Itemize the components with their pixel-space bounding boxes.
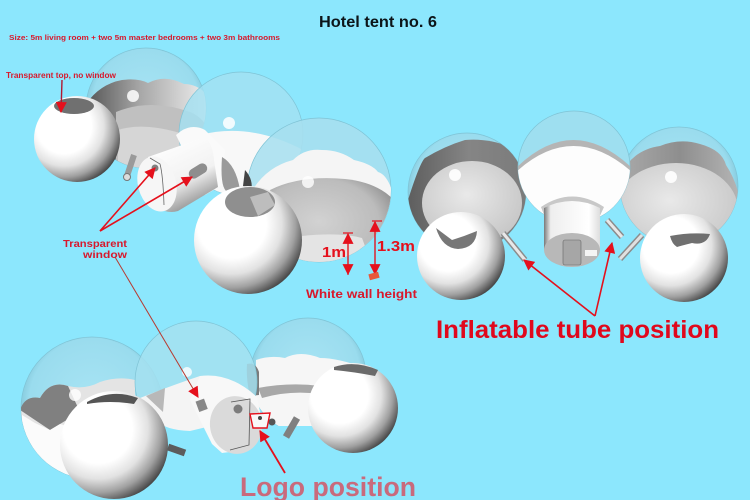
callout: transparent window: window — [82, 249, 128, 261]
callout: white wall height: 1m — [322, 244, 346, 261]
dome: left bedroom — [86, 48, 208, 175]
callout: transparent window — [63, 168, 198, 397]
left sphere — [417, 212, 505, 300]
callout: transparent window: Transparent — [63, 238, 128, 250]
entrance cylinder — [541, 196, 604, 267]
connector: entrance to bedrooms — [176, 127, 240, 195]
tent view: front — [408, 111, 740, 302]
callout: transparent top — [6, 71, 117, 112]
dome: centre — [134, 320, 258, 396]
dome: right bedroom — [243, 118, 392, 265]
logo marker — [250, 413, 270, 428]
inflatable tubes — [503, 220, 642, 260]
connector: entrance to bedrooms — [135, 367, 215, 431]
dome: right — [621, 126, 738, 236]
inflatable tube — [124, 155, 134, 180]
callout: transparent top: Transparent top, no window — [6, 71, 117, 80]
callout: logo position — [240, 431, 416, 500]
right sphere — [640, 214, 728, 302]
size description: Size: 5m living room + two 5m master bedrooms + two 3m bathrooms — [9, 33, 280, 42]
callout: white wall height: White wall height — [306, 289, 417, 301]
large sphere: bathroom — [194, 186, 302, 294]
left sphere — [60, 391, 168, 499]
dome: centre — [516, 111, 632, 225]
tent view: top-left perspective — [34, 48, 392, 294]
title: Hotel tent no. 6 — [319, 14, 437, 31]
right sphere — [308, 363, 398, 453]
dome: left — [408, 132, 526, 240]
entrance cylinder — [131, 137, 218, 216]
small sphere: bathroom — [34, 96, 120, 182]
callout: white wall height — [306, 221, 417, 301]
callout: inflatable tube position — [436, 243, 719, 344]
callout: inflatable tube position: Inflatable tube position — [436, 316, 719, 344]
entrance cylinder — [190, 375, 267, 458]
dome: living room — [179, 72, 303, 200]
inflatable tubes — [168, 418, 297, 453]
dome: right — [247, 318, 366, 426]
dome: left — [20, 336, 140, 476]
callout: white wall height: 1.3m — [377, 238, 415, 255]
tent view: rear — [20, 318, 398, 499]
